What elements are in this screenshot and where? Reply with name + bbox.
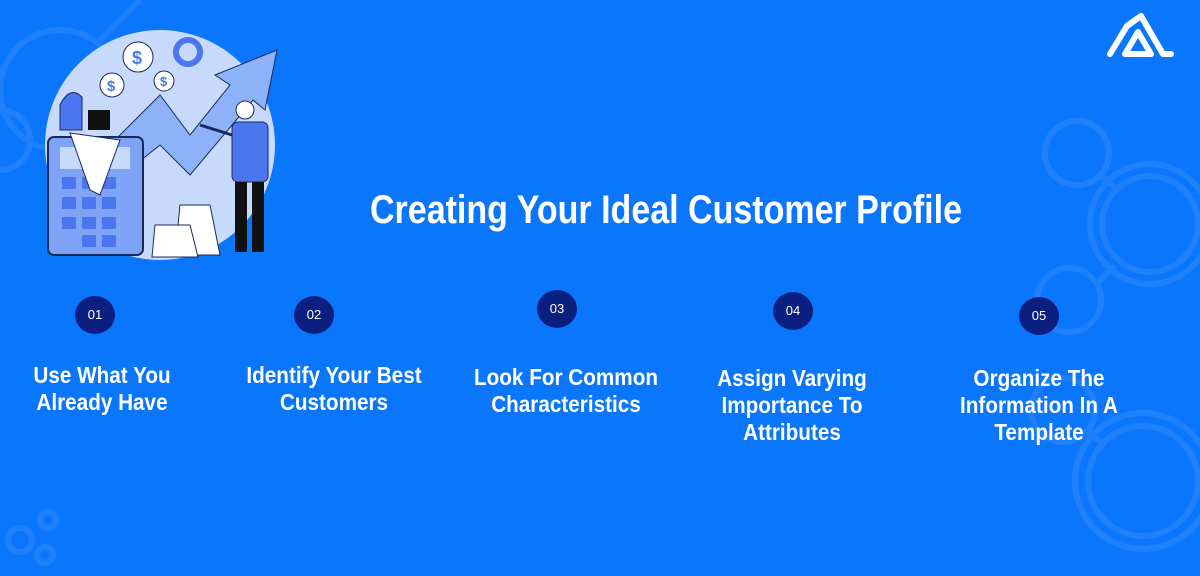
illustration: customer growth: [45, 30, 278, 260]
label 4: Attributes: [743, 419, 841, 445]
number 01: 01: [88, 307, 102, 322]
number 02: 02: [307, 307, 321, 322]
label 2: Customers: [280, 389, 388, 415]
title: Creating Your Ideal Customer Profile: [370, 188, 962, 232]
illustration: customer growth: $: [160, 74, 168, 89]
label 4: Assign Varying: [717, 365, 867, 391]
number 05: 05: [1032, 308, 1046, 323]
label 5: Information In A: [960, 392, 1118, 418]
number 03: 03: [550, 301, 564, 316]
label 3: [474, 364, 658, 417]
label 1: [33, 362, 171, 415]
label 5: Organize The: [973, 365, 1105, 391]
label 2: [246, 362, 422, 415]
label 4: [717, 365, 867, 445]
step 4: [717, 292, 867, 445]
step 1: [33, 296, 171, 415]
label 2: Identify Your Best: [246, 362, 422, 388]
number 01: [75, 296, 115, 334]
step 5: [960, 297, 1118, 445]
number 05: [1019, 297, 1059, 335]
number 04: [773, 292, 813, 330]
number 04: 04: [786, 303, 800, 318]
step 2: [246, 296, 422, 415]
label 1: Use What You: [33, 362, 171, 388]
label 1: Already Have: [36, 389, 168, 415]
label 5: Template: [994, 419, 1084, 445]
label 5: [960, 365, 1118, 445]
label 3: Look For Common: [474, 364, 658, 390]
illustration: customer growth: $: [107, 78, 116, 95]
logo: [1107, 13, 1174, 57]
step 3: [474, 290, 658, 417]
label 3: Characteristics: [491, 391, 641, 417]
number 02: [294, 296, 334, 334]
label 4: Importance To: [721, 392, 863, 418]
illustration: customer growth: $: [132, 48, 142, 68]
number 03: [537, 290, 577, 328]
